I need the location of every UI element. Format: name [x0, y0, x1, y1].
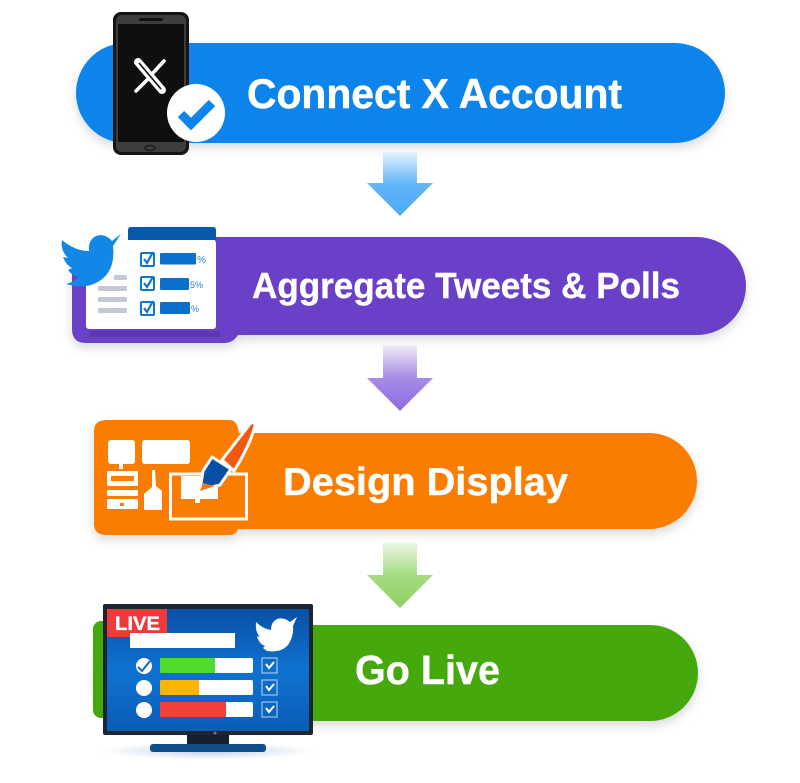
arrow 2 — [367, 345, 433, 411]
step 1: connect X account — [76, 12, 725, 155]
green bar — [93, 625, 698, 721]
step 4: go live — [93, 604, 698, 760]
arrow 3 — [367, 542, 433, 608]
orange bar and panel — [94, 420, 697, 535]
white bird — [256, 617, 297, 651]
arrow 1 — [367, 152, 433, 216]
heading: Aggregate Tweets & Polls: Aggregate Tweets & Polls — [252, 265, 680, 306]
icon: phone with X logo — [113, 12, 189, 155]
icon: layout blocks — [107, 440, 190, 510]
icon: poll card: % — [197, 255, 206, 266]
icon: poll card: % — [191, 304, 199, 314]
step 3: design display — [94, 420, 697, 535]
icon: canvas with brush — [170, 422, 255, 519]
heading: Go Live: Go Live — [355, 647, 500, 693]
icon: monitor with live poll — [100, 604, 316, 760]
icon: poll card: 5% — [190, 280, 203, 290]
icon: poll card — [86, 227, 220, 337]
purple bar and panel — [72, 237, 746, 343]
icon: check badge — [167, 84, 225, 142]
heading: Connect X Account: Connect X Account — [247, 70, 622, 117]
live badge: LIVE — [115, 613, 160, 635]
step 2: aggregate tweets and polls — [62, 227, 746, 343]
icon: blue bird — [62, 234, 121, 286]
live badge — [107, 609, 167, 637]
blue pill — [76, 43, 725, 143]
heading: Design Display: Design Display — [283, 461, 568, 504]
poll rows — [136, 658, 277, 718]
